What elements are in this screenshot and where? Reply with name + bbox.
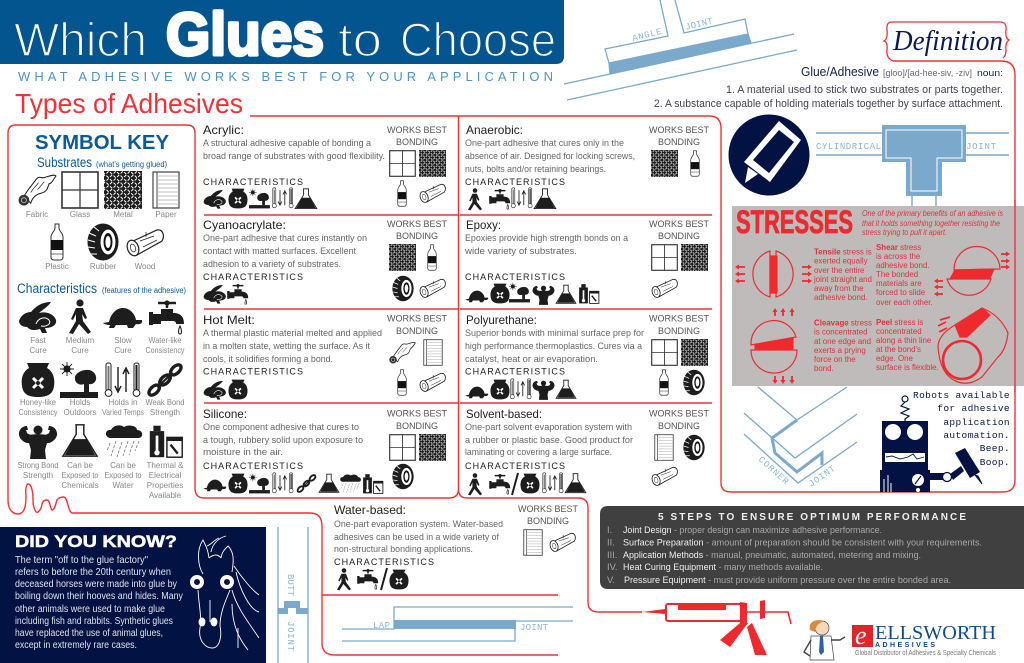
characteristics labels: Medium — [66, 336, 95, 345]
text: shear: forced to slide — [876, 288, 926, 297]
steps list: IV. — [607, 562, 618, 572]
works best bonding: BONDING — [658, 326, 700, 336]
panel: acrylic — [203, 123, 448, 209]
characteristics labels: Weak Bond — [146, 398, 184, 407]
panel: hot melt — [203, 313, 448, 400]
robot text — [913, 390, 1010, 468]
logo: ellsworth adhesives: e — [855, 621, 867, 650]
text: peel — [876, 318, 939, 372]
intro text: that it holds something together resisting the — [862, 218, 1000, 228]
definition text — [654, 64, 1003, 110]
heading: Acrylic: — [203, 123, 244, 137]
subtitle: WHAT ADHESIVE WORKS BEST FOR YOUR APPLICATION — [18, 69, 553, 84]
text: tensile — [813, 248, 872, 302]
works best bonding — [649, 314, 710, 395]
header banner — [0, 0, 564, 68]
substrates heading — [37, 155, 167, 170]
diagram: butt joint: BUTT — [285, 574, 295, 597]
diagram: angle joint: ANGLE — [631, 27, 663, 44]
description — [203, 327, 382, 364]
diagram: shear — [934, 247, 1010, 296]
characteristics icons — [204, 380, 248, 400]
substrates labels: Rubber — [90, 262, 116, 271]
works best bonding — [649, 408, 710, 487]
substrates labels: Metal — [113, 210, 133, 219]
works best bonding: BONDING — [658, 421, 700, 431]
robot text: Robots available — [913, 390, 1010, 401]
text: peel: surface is flexible. — [876, 363, 939, 372]
description: high performance thermoplastics. Cures via a — [465, 340, 643, 351]
body text: other animals were used to make glue — [15, 604, 165, 615]
steps list: Application Methods - manual, pneumatic, automated, metering and mixing. — [623, 550, 921, 560]
description: One-part adhesive that cures instantly on — [203, 232, 367, 243]
intro text — [862, 208, 1003, 237]
characteristics labels: Strong Bond — [18, 461, 58, 470]
characteristics label: CHARACTERISTICS — [203, 177, 303, 187]
description: A thermal plastic material melted and applied — [203, 327, 382, 338]
illustration: robot — [880, 396, 982, 492]
works best bonding — [387, 125, 448, 206]
panel: water-based — [334, 503, 579, 590]
works best bonding: BONDING — [396, 326, 438, 336]
steps list: II. — [607, 538, 615, 548]
description: cools, it solidifies forming a bond. — [203, 353, 333, 364]
characteristics labels: Water — [112, 481, 134, 490]
panel: anaerobic — [465, 123, 710, 210]
diagram: corner joint: JOINT — [807, 464, 838, 489]
characteristics label: CHARACTERISTICS — [334, 557, 434, 567]
characteristics label: CHARACTERISTICS — [465, 366, 565, 376]
robot text: Boop. — [980, 457, 1010, 468]
works best bonding: WORKS BEST — [518, 504, 579, 514]
logo: ellsworth adhesives: ADHESIVES — [875, 642, 935, 649]
characteristics icons — [465, 283, 599, 305]
characteristics labels: Honey-like — [20, 398, 57, 407]
substrates heading: (what's getting glued) — [96, 160, 167, 169]
panel: symbol key — [17, 132, 186, 500]
characteristics icons — [465, 379, 576, 400]
characteristics labels: Strength — [23, 471, 53, 480]
title: Glues — [166, 1, 324, 68]
description — [465, 137, 635, 174]
works best bonding: BONDING — [658, 231, 700, 241]
description — [203, 421, 363, 457]
works best bonding — [387, 219, 448, 301]
description — [465, 421, 633, 457]
description: laminating or covering a large surface. — [465, 446, 612, 457]
heading: Silicone: — [203, 407, 247, 421]
substrates labels: Plastic — [45, 262, 69, 271]
title: to — [338, 13, 382, 66]
text: peel: Peel stress is — [876, 318, 923, 327]
characteristics icons — [468, 188, 556, 210]
text: peel: at the bond's — [876, 345, 921, 354]
characteristics labels: Can be — [110, 461, 136, 470]
steps list: Pressure Equipment - must provide uniform pressure over the entire bonded area. — [624, 575, 951, 585]
diagram: angle joint: JOINT — [684, 16, 714, 33]
description: wide variety of substrates. — [464, 245, 577, 256]
panel: silicone — [203, 407, 448, 493]
diagram: tensile — [735, 251, 812, 297]
characteristics label: CHARACTERISTICS — [465, 461, 565, 471]
text: tensile: away from the — [814, 284, 864, 293]
characteristics labels: Properties — [147, 481, 183, 490]
substrates labels: Wood — [135, 262, 155, 271]
text: shear: adhesive bond. — [876, 261, 930, 270]
text: tensile: Tensile stress is — [814, 248, 872, 256]
description: adhesion to a variety of substrates. — [203, 258, 341, 269]
illustration: horse — [192, 536, 259, 650]
text: shear: Shear stress — [876, 243, 921, 252]
characteristics labels: Consistency — [18, 408, 58, 417]
characteristics labels: Fast — [30, 336, 47, 345]
heading: Anaerobic: — [466, 123, 523, 137]
body text: deceased horses were made into glue by — [15, 579, 177, 590]
definition badge: Definition — [892, 26, 1003, 57]
diagram: lap joint — [342, 607, 573, 641]
definition text: 1. A material used to stick two substrates or parts together. — [726, 84, 1003, 96]
description: Superior bonds with minimal surface prep for — [465, 327, 644, 338]
substrates labels: Paper — [155, 210, 177, 219]
definition text: Glue/Adhesive — [801, 64, 879, 79]
robot text: application — [943, 417, 1010, 428]
characteristics labels: Available — [149, 491, 182, 500]
characteristics label: CHARACTERISTICS — [465, 272, 565, 282]
diagram: lap joint: JOINT — [520, 623, 549, 633]
description: contact with matted surfaces. Excellent — [203, 245, 356, 256]
body text: including fish and rabbits. Synthetic glues — [15, 616, 173, 627]
intro text: One of the primary benefits of an adhesive is — [862, 208, 1003, 218]
characteristics labels: Holds in — [109, 398, 137, 407]
description: adhesives can be used in a wide variety of — [334, 531, 499, 542]
heading: Polyurethane: — [466, 313, 537, 327]
diagram: cylindrical joint: CYLINDRICAL — [816, 142, 881, 152]
text: tensile: joint straight and — [813, 275, 872, 284]
works best bonding — [518, 504, 579, 555]
works best bonding — [387, 408, 448, 489]
characteristics icons — [19, 299, 184, 459]
text: peel: along a thin line — [876, 336, 932, 345]
panel: solvent-based — [465, 407, 710, 495]
characteristics heading: (features of the adhesive) — [102, 286, 186, 295]
description: nuts, bolts and/or retaining bearings. — [465, 163, 606, 174]
works best bonding: BONDING — [396, 231, 438, 241]
steps list: Heat Curing Equipment - many methods available. — [623, 562, 823, 572]
heading: symbol key: SYMBOL KEY — [35, 132, 170, 154]
heading: Epoxy: — [466, 218, 501, 232]
body text: have replaced the use of animal glues, — [15, 628, 163, 639]
characteristics heading — [17, 281, 186, 296]
body text — [15, 555, 183, 651]
characteristics labels: Chemicals — [61, 481, 99, 490]
characteristics labels: Consistency — [146, 346, 184, 355]
text: shear: is across the — [876, 252, 921, 261]
intro text: stress trying to pull it apart. — [862, 227, 947, 237]
text: tensile: exerted equally — [814, 256, 868, 266]
characteristics heading: Characteristics — [17, 281, 97, 296]
description: One component adhesive that cures to — [203, 421, 359, 432]
diagram: corner joint — [744, 387, 857, 489]
diagram: cylindrical joint — [816, 125, 1009, 206]
characteristics labels: Cure — [71, 346, 89, 355]
description: absence of air. Designed for locking screws, — [465, 150, 635, 161]
definition text: 2. A substance capable of holding materials together by surface attachment. — [654, 98, 1003, 110]
text: cleavage: is concentrated — [814, 328, 868, 336]
panel: epoxy — [464, 218, 710, 305]
works best bonding — [649, 219, 710, 299]
works best bonding — [649, 125, 710, 177]
works best bonding: WORKS BEST — [387, 125, 448, 135]
robot text: automation. — [943, 430, 1010, 441]
characteristics labels: Exposed to — [104, 471, 142, 480]
substrates heading: Substrates — [37, 155, 92, 170]
characteristics icons — [468, 473, 586, 495]
description: catalyst, heat or air evaporation. — [465, 353, 598, 364]
heading: stresses: STRESSES — [736, 204, 853, 240]
description — [464, 232, 629, 256]
diagram: cylindrical joint: JOINT — [966, 142, 997, 152]
logo: ellsworth adhesives: ELLSWORTH — [875, 622, 996, 644]
title: Choose — [400, 13, 556, 66]
body text: except in extremely rare cases. — [15, 640, 137, 651]
works best bonding: BONDING — [396, 137, 438, 147]
body text: boiling down their hooves and hides. Many — [15, 591, 183, 602]
characteristics labels: Holds — [70, 398, 90, 407]
text: tensile: adhesive bond. — [814, 293, 868, 302]
steps list — [607, 525, 982, 585]
characteristics label: CHARACTERISTICS — [203, 272, 303, 282]
text: shear — [876, 243, 933, 307]
text: shear: over each other. — [876, 298, 933, 307]
robot text: Beep. — [980, 443, 1010, 454]
text: shear: materials are — [876, 279, 922, 288]
heading: Cyanoacrylate: — [203, 218, 286, 232]
illustration: caulk gun — [642, 600, 791, 655]
characteristics labels: Cure — [29, 346, 47, 355]
heading: types of adhesives: Types of Adhesives — [15, 88, 243, 119]
characteristics icons — [203, 473, 383, 493]
text: peel: edge. One — [876, 354, 913, 363]
text: cleavage: exerts a prying — [814, 346, 866, 355]
diagram: angle joint — [564, 0, 797, 100]
works best bonding: BONDING — [396, 421, 438, 431]
steps list: I. — [607, 525, 612, 535]
characteristics label: CHARACTERISTICS — [203, 366, 303, 376]
characteristics icons — [337, 568, 409, 590]
heading: Water-based: — [334, 503, 406, 517]
characteristics labels: Varied Temps — [102, 408, 144, 417]
heading: DID YOU KNOW? — [15, 532, 177, 551]
characteristics labels: Electrical — [149, 471, 181, 480]
logo: ellsworth adhesives: Global Distributor of Adhesives & Specialty Chemicals — [855, 650, 996, 657]
diagram: cleavage — [751, 308, 797, 384]
description: a tough, rubbery solid upon exposure to — [203, 434, 363, 445]
text: tensile: over the entire — [814, 266, 865, 275]
substrates labels: Glass — [70, 210, 90, 219]
characteristics labels: Cure — [114, 346, 132, 355]
description: A structural adhesive capable of bonding a — [203, 137, 372, 148]
characteristics label: CHARACTERISTICS — [465, 177, 565, 187]
works best bonding — [387, 314, 448, 395]
title — [14, 1, 556, 68]
panel: stresses — [732, 200, 1024, 392]
works best bonding: WORKS BEST — [387, 219, 448, 229]
characteristics labels: Exposed to — [62, 471, 99, 480]
characteristics labels — [18, 336, 184, 500]
characteristics labels: Thermal & — [147, 461, 184, 470]
steps list: Surface Preparation - amount of preparation should be consistent with your requirements. — [623, 538, 982, 548]
characteristics label: CHARACTERISTICS — [203, 461, 303, 471]
works best bonding: WORKS BEST — [649, 125, 710, 135]
panel: cyanoacrylate — [203, 218, 448, 304]
characteristics icons — [204, 188, 317, 209]
description: One-part evaporation system. Water-based — [334, 518, 503, 529]
definition text: noun: — [977, 68, 1003, 79]
text: cleavage — [814, 318, 872, 373]
text: cleavage: bond. — [814, 364, 834, 373]
robot text: for adhesive — [937, 403, 1010, 414]
panel: five steps — [600, 506, 1024, 589]
works best bonding: WORKS BEST — [649, 408, 710, 418]
substrates labels — [26, 210, 177, 271]
description: a rubber or plastic base. Good product for — [465, 434, 633, 445]
description: non-structural bonding applications. — [334, 543, 473, 554]
characteristics labels: Slow — [114, 336, 132, 345]
characteristics labels: Strength — [150, 408, 180, 417]
body text: refers to before the 20th century when — [15, 567, 171, 578]
steps list: Joint Design - proper design can maximize adhesive performance. — [623, 525, 882, 535]
heading: Solvent-based: — [466, 407, 542, 421]
description: moisture in the air. — [203, 446, 283, 457]
works best bonding: WORKS BEST — [387, 314, 448, 324]
characteristics icons — [204, 284, 248, 304]
text: cleavage: Cleavage stress — [814, 318, 872, 328]
panel: polyurethane — [465, 313, 710, 400]
heading: 5 STEPS TO ENSURE OPTIMUM PERFORMANCE — [658, 512, 966, 523]
logo: ellsworth adhesives — [852, 621, 996, 657]
text: cleavage: force on the — [814, 355, 856, 364]
description — [203, 232, 367, 269]
characteristics labels: Can be — [67, 461, 93, 470]
description: in a molten state, wetting the surface. As it — [203, 340, 370, 351]
diagram: peel — [938, 308, 1008, 383]
description — [203, 137, 385, 161]
steps list: III. — [607, 550, 617, 560]
diagram: butt joint — [278, 527, 308, 663]
title: Which — [14, 13, 147, 66]
description: broad range of substrates with good flexibility. — [203, 150, 385, 161]
characteristics labels: Outdoors — [64, 408, 96, 417]
description: One-part solvent evaporation system with — [465, 421, 632, 432]
diagram: butt joint: JOINT — [285, 621, 295, 652]
description — [334, 518, 503, 554]
panel: did you know — [0, 527, 266, 663]
works best bonding: WORKS BEST — [649, 219, 710, 229]
definition text: [gloo]/[ad-hee-siv, -ziv] — [883, 68, 972, 78]
text: cleavage: at one edge and — [814, 337, 871, 346]
works best bonding: BONDING — [658, 137, 700, 147]
diagram: corner joint: CORNER — [756, 455, 791, 487]
text: shear: The bonded — [876, 270, 918, 279]
description — [465, 327, 644, 364]
works best bonding: WORKS BEST — [387, 408, 448, 418]
description: Epoxies provide high strength bonds on a — [465, 232, 629, 243]
works best bonding: WORKS BEST — [649, 314, 710, 324]
diagram: lap joint: LAP — [373, 621, 390, 631]
substrates icons — [19, 171, 179, 260]
works best bonding: BONDING — [527, 516, 569, 526]
text: peel: concentrated — [876, 327, 922, 336]
illustration: scientist mascot — [804, 620, 845, 660]
body text: The term "off to the glue factory" — [15, 555, 149, 566]
icon: glue tube — [728, 114, 810, 196]
steps list: V. — [607, 575, 615, 585]
heading: Hot Melt: — [203, 313, 255, 327]
characteristics labels: Water-like — [148, 336, 182, 345]
description: One-part adhesive that cures only in the — [465, 137, 624, 148]
substrates labels: Fabric — [26, 210, 48, 219]
